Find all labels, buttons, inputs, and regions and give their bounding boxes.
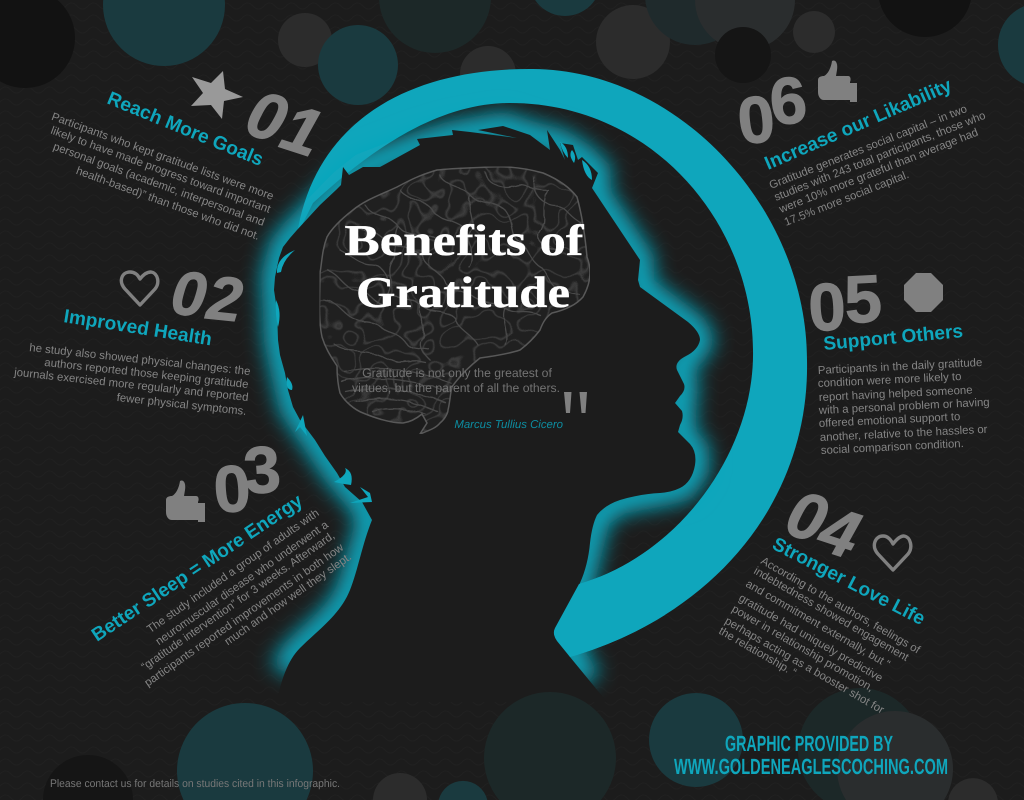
text 05: another, relative to the hassles or [820,424,988,444]
section 01: reach more goals [49,71,331,243]
decorative bokeh circles: bottom [43,688,998,800]
number 02: 0 [168,258,210,331]
text 01: personal goals (academic, interpersonal and [51,141,266,229]
section 06: increase likability [734,61,987,229]
icon: star [191,71,243,119]
number 02: 2 [203,263,246,336]
title: Gratitude [356,268,570,317]
number 01: 1 [273,89,331,171]
text 04: According to the authors, feelings of [758,555,923,657]
quote: virtues, but the parent of all the others. [352,381,560,395]
text 05: offered emotional support to [819,411,961,430]
heading 04: Stronger Love Life [769,534,928,630]
heading 01: Reach More Goals [104,88,266,171]
text 03: neuromuscular disease who underwent a [154,519,331,648]
text 02: fewer physical symptoms. [116,392,247,418]
section 03: better sleep [88,431,354,689]
icon: heart outline [121,272,158,305]
text 03: “gratitude intervention” for 3 weeks. Afterward, [139,530,337,673]
icon: octagon [904,273,943,312]
heading 02: Improved Health [62,306,213,350]
number 04: 4 [809,491,869,573]
text 05: with a personal problem or having [818,397,990,417]
text 04 [716,555,923,717]
text 06: were 10% more grateful than average had [777,127,980,216]
text 01: health-based)” than those who did not. [74,165,261,243]
text 05: report having helped someone [819,384,973,404]
number 05: 0 [807,269,848,346]
head glow [275,126,700,680]
title [344,216,585,317]
text 05: Participants in the daily gratitude [818,357,983,377]
heading 06: Increase our Likability [762,75,955,175]
text 02: he study also showed physical changes: the [29,342,251,378]
text 06: 17.5% more social capital. [783,169,911,229]
number 06: 0 [734,81,778,158]
number 06: 6 [766,62,810,139]
hair wisps [276,142,592,503]
number 01 [238,75,331,171]
text 03: The study included a group of adults with [145,507,322,636]
text 04: indebtedness showed engagement [752,565,911,664]
title: Benefits of [344,216,585,265]
text 02 [13,342,251,418]
icon: thumbs up [166,481,205,522]
credit: GRAPHIC PROVIDED BY [725,731,893,756]
number 03 [211,431,283,527]
quote [352,366,587,431]
quote: Gratitude is not only the greatest of [362,366,552,380]
number 03: 0 [211,450,253,527]
heading 05: Support Others [823,321,964,355]
heading 03: Better Sleep = More Energy [88,490,307,646]
number 06 [734,62,810,158]
number 04: 0 [778,475,836,557]
text 06: studies with 243 total participants, those who [773,110,987,204]
text 01: likely to have made progress toward important [49,125,273,216]
number 04 [778,475,869,573]
brain illustration [320,167,590,434]
credit [674,731,948,779]
text 06: Gratitude generates social capital – in two [768,103,969,192]
text 05: social comparison condition. [821,438,964,457]
section 05: support others [807,261,990,457]
text 01 [49,111,275,243]
brain folds [324,172,580,414]
section 04: stronger love life [716,475,928,717]
decorative bokeh circles: top [0,0,1024,105]
number 01: 0 [238,75,296,157]
head silhouette [274,126,700,702]
footnote: Please contact us for details on studies cited in this infographic. [50,778,340,790]
text 04: and commitment externally, but “ [744,578,892,671]
number 03: 3 [241,431,283,508]
number 05: 5 [843,261,884,338]
section 02: improved health [13,258,251,418]
text 04: perhaps acting as a booster shot for [722,615,886,717]
text 04: gratitude had uniquely predictive [736,592,885,685]
number 05 [807,261,884,346]
text 05 [818,357,990,457]
text 01: Participants who kept gratitude lists were more [50,111,275,203]
text 04: the relationship. “ [716,625,798,679]
text 02: journals exercised more regularly and reported [13,367,249,404]
text 04: power in relationship promotion, [730,603,875,694]
text 03: much and how well they slept. [223,551,354,648]
text 02: authors reported those keeping gratitude [44,357,249,391]
icon: thumbs up [818,61,857,102]
number 02 [168,258,246,336]
teal crescent band [297,69,807,657]
band lower part over the neck [554,540,665,657]
text 03: participants reported improvements in both how [143,541,347,689]
icon: heart outline [874,536,911,570]
text 05: condition were more likely to [818,371,962,390]
quote: Marcus Tullius Cicero [454,419,563,431]
